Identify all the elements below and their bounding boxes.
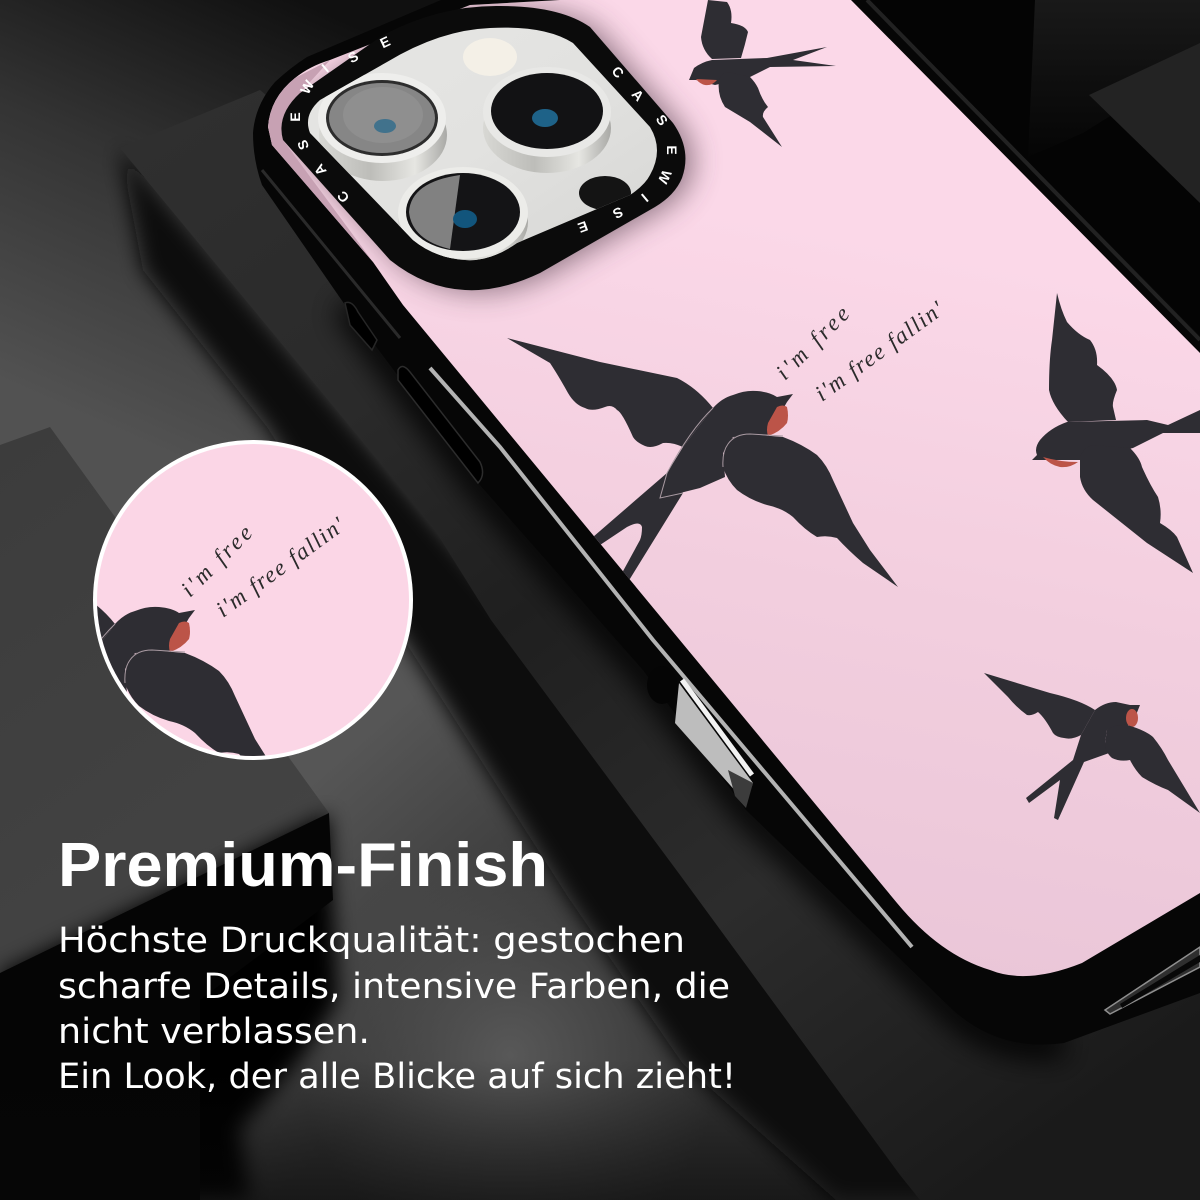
shaded pink sliver xyxy=(268,60,373,262)
brand ring right xyxy=(576,63,680,236)
bottom vignette xyxy=(0,1060,1200,1200)
brand ring left: I xyxy=(318,61,332,75)
brand ring right: E xyxy=(664,145,680,155)
pink printed back xyxy=(268,0,1200,976)
left step block top xyxy=(0,427,329,973)
left step block front xyxy=(0,813,338,1200)
brand ring left: A xyxy=(311,161,329,179)
body text: Höchste Druckqualität: gestochen xyxy=(58,921,685,961)
right rim highlight xyxy=(867,0,1200,340)
charging port xyxy=(1105,947,1200,1014)
heading: Premium-Finish xyxy=(58,831,548,900)
body text: Ein Look, der alle Blicke auf sich zieht! xyxy=(58,1057,736,1097)
phone case xyxy=(253,0,1200,1045)
brand ring left xyxy=(287,33,393,206)
lidar sensor xyxy=(579,176,631,210)
body text: scharfe Details, intensive Farben, die xyxy=(58,967,730,1007)
mute switch xyxy=(345,302,377,350)
brand ring right: E xyxy=(576,218,590,236)
camera island xyxy=(281,6,685,290)
body text xyxy=(58,921,736,1097)
lens top-left xyxy=(318,73,447,181)
body text: nicht verblassen. xyxy=(58,1012,370,1052)
brand ring right: I xyxy=(638,191,652,205)
brand ring left: S xyxy=(294,138,312,152)
handwritten lyric detail: i'm free fallin' xyxy=(211,512,350,622)
soft light on the floor xyxy=(280,840,760,1200)
top right background xyxy=(851,0,1200,360)
brand ring right: W xyxy=(655,168,675,187)
bird center xyxy=(507,338,898,587)
handwritten lyric: i'm free fallin' xyxy=(810,296,949,406)
bird top xyxy=(689,0,836,147)
brand ring right: S xyxy=(610,204,626,222)
power button xyxy=(675,680,753,808)
case body xyxy=(253,0,1200,1045)
lens bottom xyxy=(398,167,528,267)
bird bottom right xyxy=(984,673,1200,820)
brand ring left: W xyxy=(297,77,318,97)
brand ring right: S xyxy=(653,112,671,128)
brand ring left: E xyxy=(377,33,393,51)
camera shadow on back xyxy=(289,8,693,292)
zoom circle callout xyxy=(93,440,413,760)
brand ring right: A xyxy=(629,86,647,104)
plinth front face xyxy=(120,148,1000,1200)
power button recess xyxy=(647,666,677,704)
handwritten lyric: i'm free xyxy=(771,301,854,385)
bird detail xyxy=(97,606,266,756)
phone contact shadow xyxy=(345,305,1064,1045)
lens top-right xyxy=(483,67,611,173)
handwritten lyric detail: i'm free xyxy=(176,520,257,602)
brand ring left: C xyxy=(334,188,352,206)
flash xyxy=(463,38,517,76)
volume button xyxy=(398,366,483,483)
left rim highlight xyxy=(430,368,912,947)
bird right xyxy=(1032,293,1200,573)
brand ring left: E xyxy=(287,112,303,122)
brand ring right: C xyxy=(609,63,627,81)
lower floor xyxy=(200,600,962,1200)
brand ring left: S xyxy=(345,48,361,66)
